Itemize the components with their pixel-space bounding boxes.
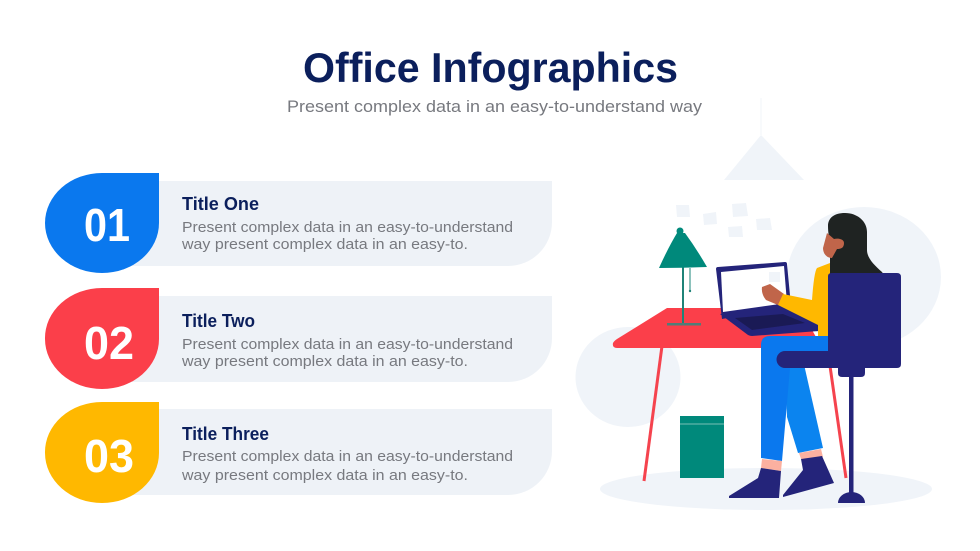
body text 02: way present complex data in an easy-to.: [181, 353, 468, 370]
body text 01: way present complex data in an easy-to.: [181, 236, 468, 253]
floor shadow: [600, 468, 932, 510]
bin: [680, 416, 724, 478]
person: yellow top: [778, 263, 830, 336]
number badge 01: [45, 173, 159, 273]
chair back and seat: [776, 273, 901, 368]
panel: item 03: [45, 402, 552, 503]
number 02: 02: [84, 317, 134, 369]
sticky notes: [676, 203, 772, 237]
chair foot: [838, 492, 865, 503]
panel: item 01: [45, 173, 552, 273]
body text 01: Present complex data in an easy-to-understand: [182, 219, 513, 236]
person: face: [823, 233, 844, 258]
number 03: 03: [84, 430, 134, 482]
person: shoes: [729, 456, 834, 498]
person: back leg: [785, 360, 823, 453]
body text 03: way present complex data in an easy-to.: [181, 467, 468, 484]
desk top: [613, 308, 822, 348]
number badge 03: [45, 402, 159, 503]
chair pole: [849, 377, 854, 493]
chair seat mount: [838, 368, 865, 377]
panel: item 02: [45, 288, 552, 389]
chair: [776, 273, 901, 503]
heading 01: Title One: [182, 194, 259, 214]
laptop: [716, 262, 819, 336]
heading 02: Title Two: [182, 311, 255, 331]
body text 03: Present complex data in an easy-to-understand: [182, 448, 513, 465]
desk lamp: [659, 228, 707, 326]
desk legs: [644, 346, 846, 481]
card background 03: [130, 409, 552, 495]
card background 01: [130, 181, 552, 266]
title: Office Infographics: [303, 44, 678, 91]
subtitle: Present complex data in an easy-to-understand way: [287, 97, 703, 116]
background circle left: [576, 327, 680, 427]
heading 03: Title Three: [182, 424, 269, 444]
person: socks: [761, 449, 823, 471]
ceiling lamp: [724, 98, 804, 180]
background circle right: [787, 207, 941, 347]
illustration: woman working at desk: [576, 98, 941, 510]
person: hand: [762, 284, 784, 305]
card background 02: [130, 296, 552, 382]
person: hair: [828, 213, 884, 275]
number 01: 01: [84, 199, 130, 251]
person: front leg: [761, 336, 830, 461]
body text 02: Present complex data in an easy-to-understand: [182, 336, 513, 353]
number badge 02: [45, 288, 159, 389]
